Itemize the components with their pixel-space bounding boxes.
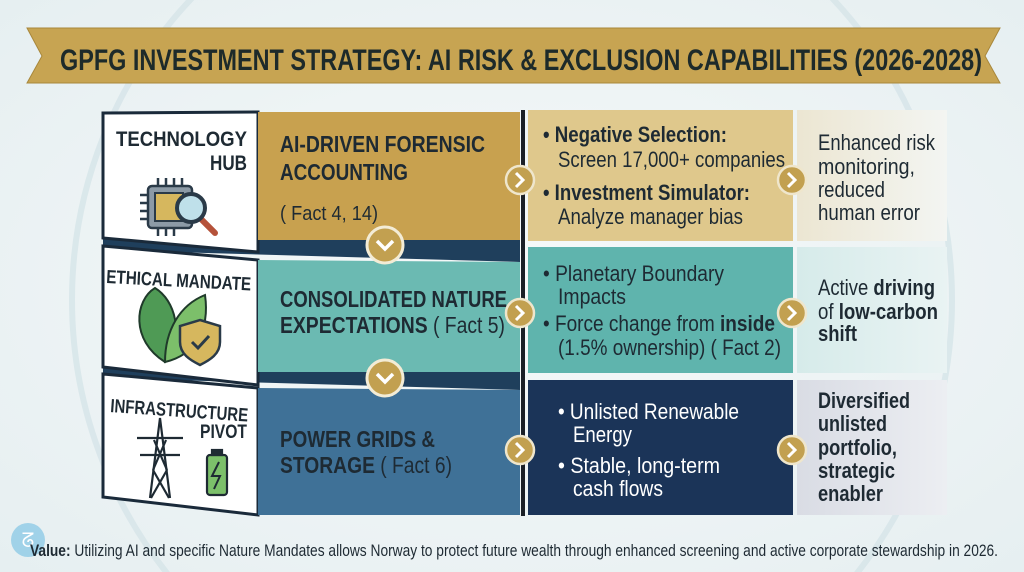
icon: logo circle	[11, 523, 45, 557]
panel: screening details: • Investment Simulator:	[543, 180, 750, 205]
panel: infrastructure details: • Unlisted Renewable	[558, 399, 739, 424]
panel: consolidated nature expectations: EXPECTATIONS ( Fact 5)	[280, 312, 505, 338]
panel: outcome 3: enabler	[818, 481, 883, 506]
panel: outcome 2: shift	[818, 321, 858, 346]
panel: outcome 1: reduced	[818, 177, 885, 202]
panel: technology hub label	[103, 112, 258, 252]
icon: logo circle: ᘔ	[22, 530, 34, 552]
panel: screening details: Analyze manager bias	[558, 204, 743, 229]
panel: outcome 1	[797, 110, 947, 241]
panel: infrastructure details: • Stable, long-term	[558, 453, 720, 478]
title banner	[27, 28, 1000, 83]
panel: outcome 2	[797, 247, 947, 373]
panel: outcome 2: of low-carbon	[818, 299, 938, 324]
panel: infrastructure pivot label: INFRASTRUCTURE	[110, 396, 249, 427]
divider line	[521, 110, 525, 516]
icon: right arrows column 2	[778, 166, 806, 464]
panel: outcome 2: Active driving	[818, 275, 935, 300]
icon: power tower and battery	[137, 418, 227, 498]
icon: right arrows column 1	[506, 166, 534, 464]
panel: outcome 3: unlisted	[818, 411, 887, 436]
panel: outcome 3: Diversified	[818, 388, 910, 413]
panel: nature details	[528, 247, 793, 373]
panel: nature details: • Planetary Boundary	[543, 261, 724, 286]
icon: down chevron 2	[367, 360, 403, 396]
panel: infrastructure details	[528, 380, 793, 515]
panel: AI-driven forensic accounting: ( Fact 4, 14)	[280, 203, 378, 225]
panel: infrastructure pivot label	[103, 374, 258, 515]
panel: nature details: Impacts	[558, 284, 626, 309]
panel: technology hub label: TECHNOLOGY	[116, 128, 247, 151]
panel: nature details: • Force change from inside	[543, 311, 775, 336]
panel: outcome 1: human error	[818, 200, 920, 225]
panel: technology hub label: HUB	[210, 152, 247, 175]
panel: ethical mandate label	[103, 246, 258, 385]
panel: outcome 3	[797, 380, 947, 515]
dark separators	[103, 236, 520, 262]
panel: AI-driven forensic accounting: AI-DRIVEN FORENSIC	[280, 131, 485, 157]
panel: outcome 1: monitoring,	[818, 154, 915, 179]
icon: chip with magnifier	[140, 178, 215, 236]
panel: outcome 1: Enhanced risk	[818, 130, 936, 155]
panel: screening details: Screen 17,000+ companies	[558, 147, 785, 172]
panel: power grids & storage: STORAGE ( Fact 6)	[280, 452, 452, 478]
panel: consolidated nature expectations: CONSOLIDATED NATURE	[280, 286, 507, 312]
panel: power grids & storage: POWER GRIDS &	[280, 426, 435, 452]
panel: infrastructure pivot label: PIVOT	[200, 422, 247, 443]
panel: consolidated nature expectations	[258, 260, 520, 372]
panel: power grids & storage	[258, 388, 520, 515]
panel: screening details: • Negative Selection:	[543, 122, 727, 147]
panel: outcome 3: portfolio,	[818, 435, 897, 460]
panel: infrastructure details: Energy	[573, 422, 632, 447]
icon: down chevron 1	[367, 227, 403, 263]
panel: AI-driven forensic accounting	[258, 112, 520, 240]
panel: infrastructure details: cash flows	[573, 476, 663, 501]
panel: nature details: (1.5% ownership) ( Fact 2)	[558, 335, 781, 360]
panel: AI-driven forensic accounting: ACCOUNTING	[280, 159, 408, 185]
panel: ethical mandate label: ETHICAL MANDATE	[106, 267, 252, 296]
panel: outcome 3: strategic	[818, 458, 895, 483]
panel: screening details	[528, 110, 793, 241]
icon: leaves and shield	[139, 288, 220, 365]
